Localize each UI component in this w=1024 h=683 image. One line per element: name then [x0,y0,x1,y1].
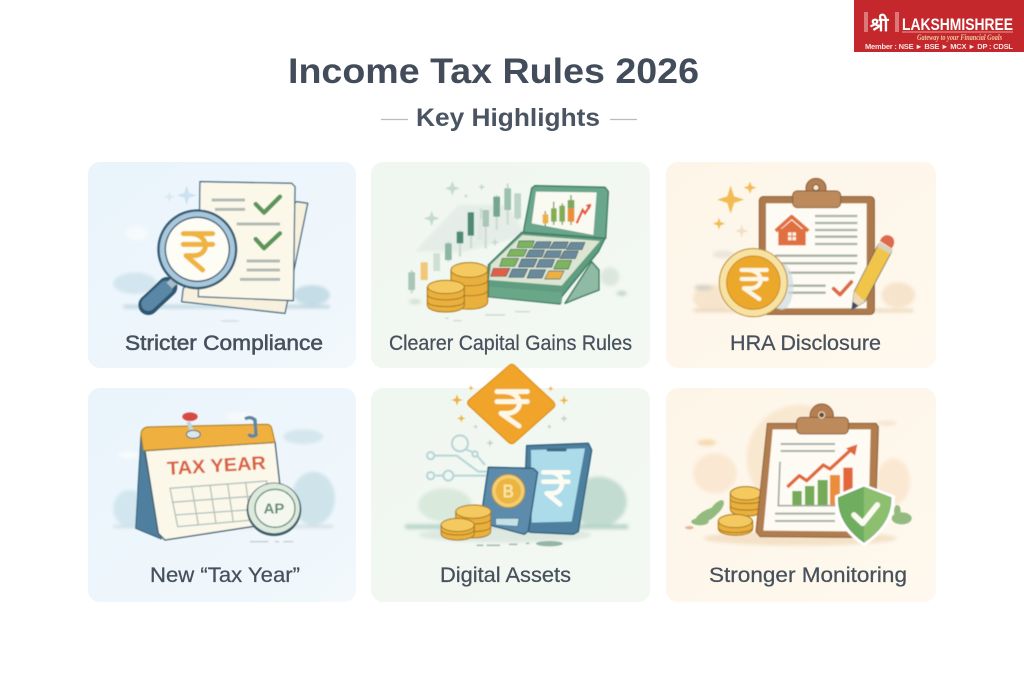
panel: Stronger Monitoring [666,388,936,602]
panel: Digital Assets [371,364,650,602]
title: Income Tax Rules 2026 [288,52,699,91]
logo: Lakshmishree [854,0,1024,52]
icon: magnifier over checked documents [113,182,330,322]
panel: New "Tax Year" [88,388,356,602]
panel: HRA Disclosure [666,162,936,368]
icon: tax year calendar [113,412,335,542]
label: HRA Disclosure: HRA Disclosure [730,332,881,355]
label: Stricter Compliance: Stricter Compliance [125,332,323,355]
label: Digital Assets: Digital Assets [440,564,571,587]
logo: Lakshmishree: Gateway to your Financial Goals [917,33,1002,42]
icon: digital assets wallet, phone and coins [405,364,628,546]
subtitle: Key Highlights: Key Highlights [416,104,600,132]
panel: Clearer Capital Gains Rules [371,162,650,368]
icon: digital assets wallet, phone and coins: B [503,481,514,502]
icon: tax year calendar: AP [264,501,285,517]
logo: Lakshmishree: Member : NSE ► BSE ► MCX ► DP : CDSL [865,42,1013,51]
logo: Lakshmishree: श्री [870,13,889,36]
icon: calculator with coins and candlesticks [408,181,627,321]
icon: clipboard growth chart with shield and coins [685,404,912,546]
label: Clearer Capital Gains Rules: Clearer Capital Gains Rules [389,332,632,355]
icon: tax year calendar: TAX YEAR [166,453,267,480]
label: New "Tax Year": New “Tax Year” [150,564,300,587]
icon: clipboard with house, rupee coin and pencil [693,178,915,317]
label: Stronger Monitoring: Stronger Monitoring [709,564,907,587]
panel: Stricter Compliance [88,162,356,368]
